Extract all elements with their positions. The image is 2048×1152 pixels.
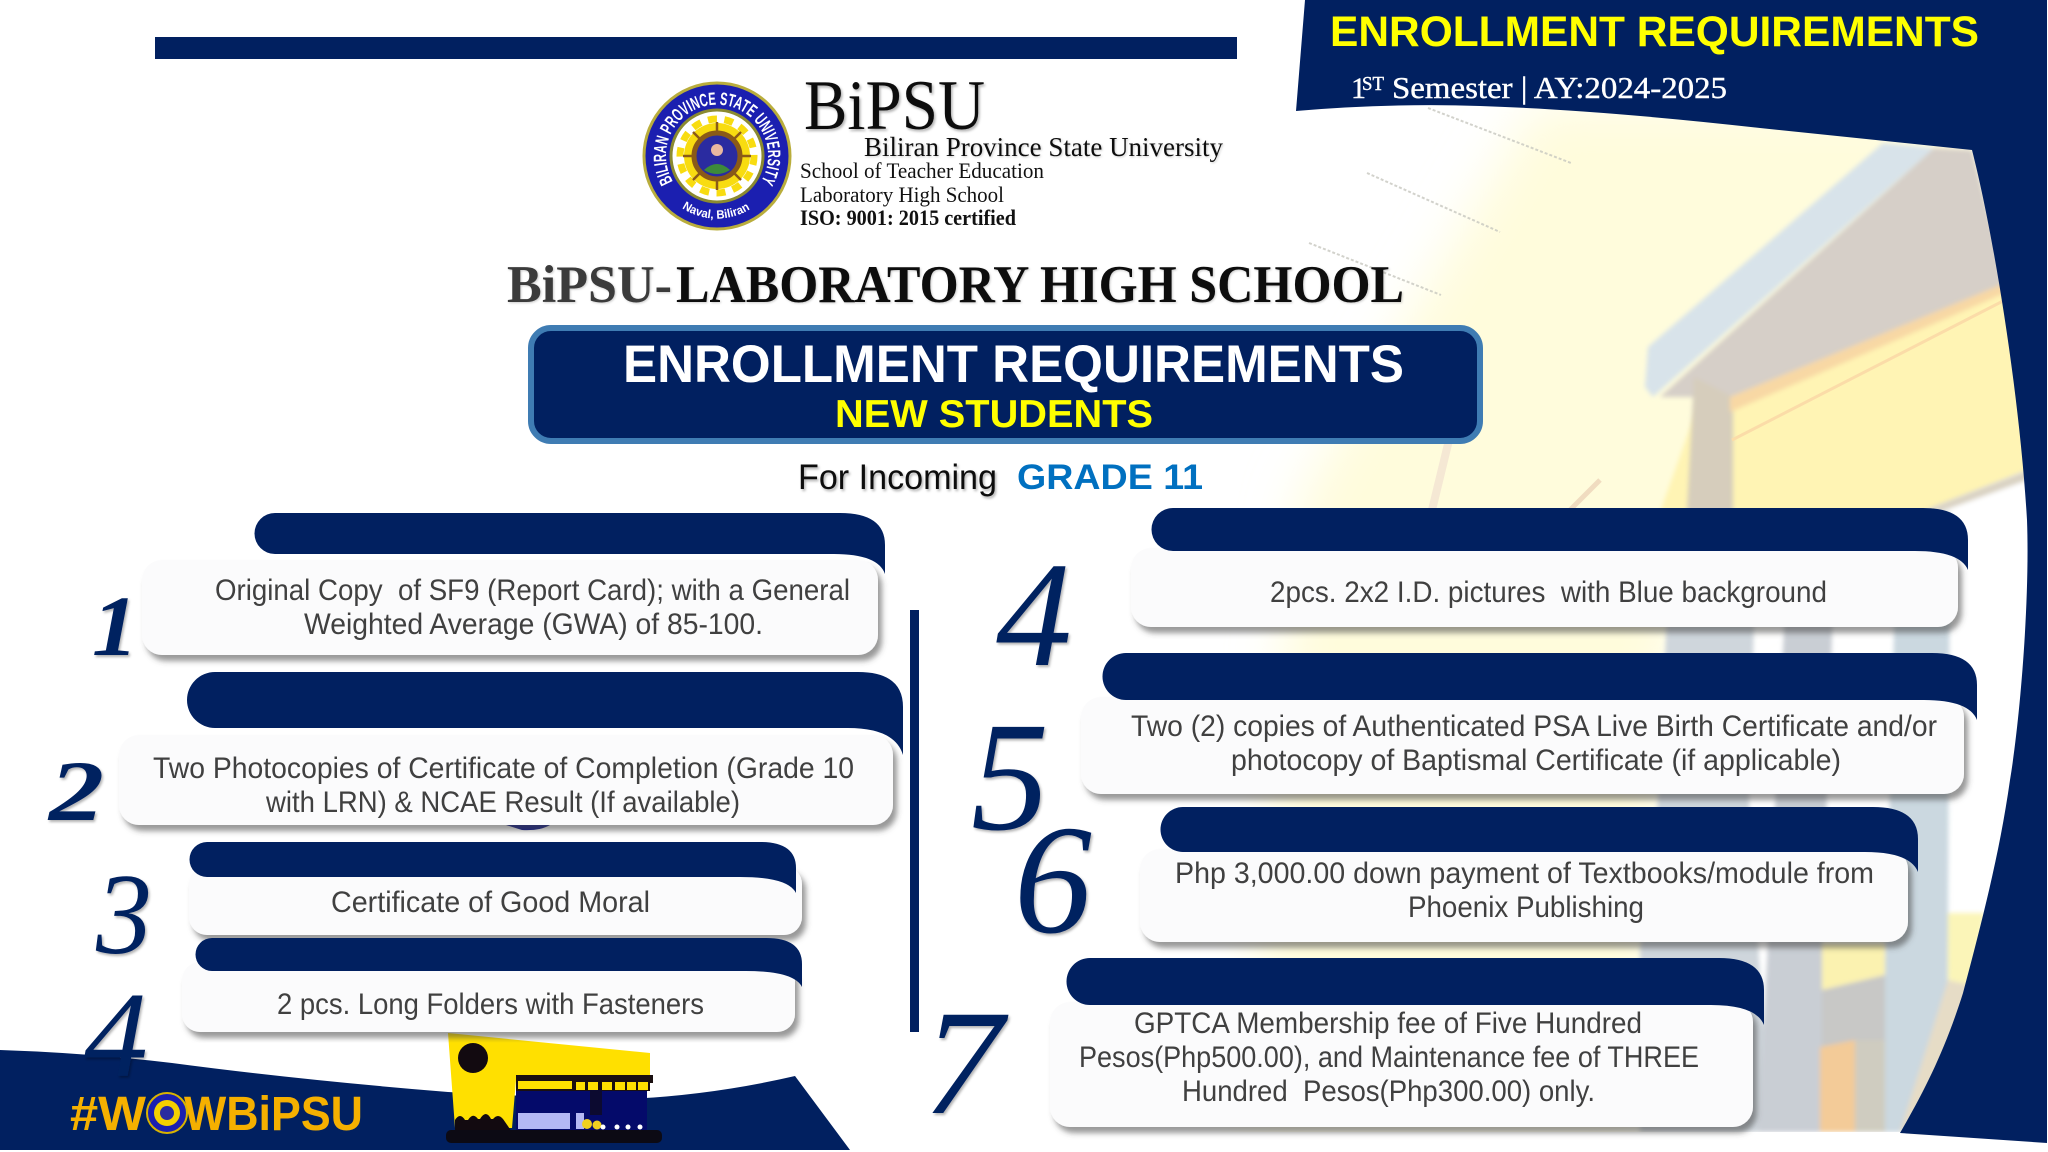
number 6: 6 <box>1014 793 1092 966</box>
hashtag: #W <box>70 1088 147 1141</box>
item 5: photocopy of Baptismal Certificate (if applicable) <box>1231 744 1841 777</box>
card <box>1081 697 1964 794</box>
title banner <box>531 328 1480 441</box>
semester label: Semester | AY:2024-2025 <box>1392 70 1727 105</box>
item 6 <box>1014 793 1918 966</box>
grade line: For Incoming <box>798 458 997 497</box>
number 1: 1 <box>92 578 138 674</box>
icon: university seal <box>642 82 792 230</box>
item 4 left <box>84 938 802 1103</box>
school line: School of Teacher Education <box>800 158 1044 183</box>
number 2: 2 <box>46 743 104 839</box>
card <box>142 560 878 655</box>
number 4: 4 <box>84 968 148 1103</box>
text: Certificate of Good Moral <box>331 886 650 919</box>
item 1 <box>92 513 885 674</box>
heading: school name: LABORATORY HIGH SCHOOL <box>676 256 1404 314</box>
background: faded school building photo <box>800 104 2040 1152</box>
text: Original Copy of SF9 (Report Card); with a General <box>215 574 850 607</box>
item 6: Phoenix Publishing <box>1408 891 1644 924</box>
card <box>1140 849 1908 942</box>
header swoop <box>254 513 885 574</box>
blip behind card <box>506 825 550 830</box>
card <box>182 962 795 1032</box>
number 3: 3 <box>95 851 152 979</box>
semester label: 1 <box>1351 72 1366 105</box>
icon: yellow building logo <box>446 1033 662 1143</box>
item 3 <box>95 842 802 979</box>
header swoop <box>1160 807 1918 872</box>
number 4: 4 <box>996 532 1072 698</box>
hashtag: O <box>150 1088 184 1141</box>
text: 2pcs. 2x2 I.D. pictures with Blue background <box>1270 576 1827 609</box>
university letterhead text <box>800 67 1223 230</box>
item 1: Weighted Average (GWA) of 85-100. <box>304 608 763 641</box>
text: GPTCA Membership fee of Five Hundred <box>1134 1007 1642 1040</box>
card <box>189 866 802 935</box>
top left navy bar <box>155 37 1237 59</box>
header: enrollment requirements tag: ENROLLMENT REQUIREMENTS <box>1330 8 1979 56</box>
number 5: 5 <box>971 690 1049 863</box>
ISO line: ISO: 9001: 2015 certified <box>800 205 1016 230</box>
semester label: ST <box>1362 73 1384 95</box>
header swoop <box>190 842 796 893</box>
number 7: 7 <box>923 980 1009 1146</box>
text: Two Photocopies of Certificate of Completion (Grade 10 <box>153 752 854 785</box>
banner subtitle: NEW STUDENTS <box>835 393 1153 436</box>
hashtag <box>70 1088 363 1141</box>
card <box>119 735 893 825</box>
top right navy panel <box>1296 0 2047 1143</box>
bottom navy band <box>0 1050 850 1150</box>
vertical divider <box>910 610 919 1032</box>
header swoop <box>1066 958 1764 1025</box>
BiPSU wordmark: BiPSU <box>804 67 985 145</box>
icon: small seal <box>147 1093 187 1133</box>
university name: Biliran Province State University <box>864 132 1223 162</box>
text: Php 3,000.00 down payment of Textbooks/module from <box>1175 857 1874 890</box>
heading: school name: BiPSU- <box>507 256 672 314</box>
header swoop <box>1102 653 1977 720</box>
card <box>1131 548 1958 627</box>
item 4 right <box>996 508 1968 698</box>
grade line: GRADE 11 <box>1017 458 1203 497</box>
text: 2 pcs. Long Folders with Fasteners <box>277 988 704 1021</box>
header swoop <box>196 938 802 987</box>
lab school line: Laboratory High School <box>800 182 1004 207</box>
icon: university seal: BILIRAN PROVINCE STATE UNIVERSITY <box>654 92 780 187</box>
item 2: with LRN) & NCAE Result (If available) <box>265 786 740 819</box>
item 7 <box>923 958 1764 1146</box>
icon: university seal: Naval, Biliran <box>682 201 750 220</box>
item 2 <box>46 672 903 839</box>
grade line <box>798 458 1203 497</box>
card <box>1050 1002 1753 1127</box>
banner title: ENROLLMENT REQUIREMENTS <box>623 335 1404 394</box>
item 5 <box>971 653 1977 863</box>
hashtag: WBiPSU <box>184 1088 363 1141</box>
header swoop <box>1152 508 1968 570</box>
header swoop <box>187 672 903 755</box>
text: Two (2) copies of Authenticated PSA Live Birth Certificate and/or <box>1131 710 1937 743</box>
item 7: Pesos(Php500.00), and Maintenance fee of THREE <box>1079 1041 1699 1074</box>
item 7: Hundred Pesos(Php300.00) only. <box>1182 1075 1595 1108</box>
